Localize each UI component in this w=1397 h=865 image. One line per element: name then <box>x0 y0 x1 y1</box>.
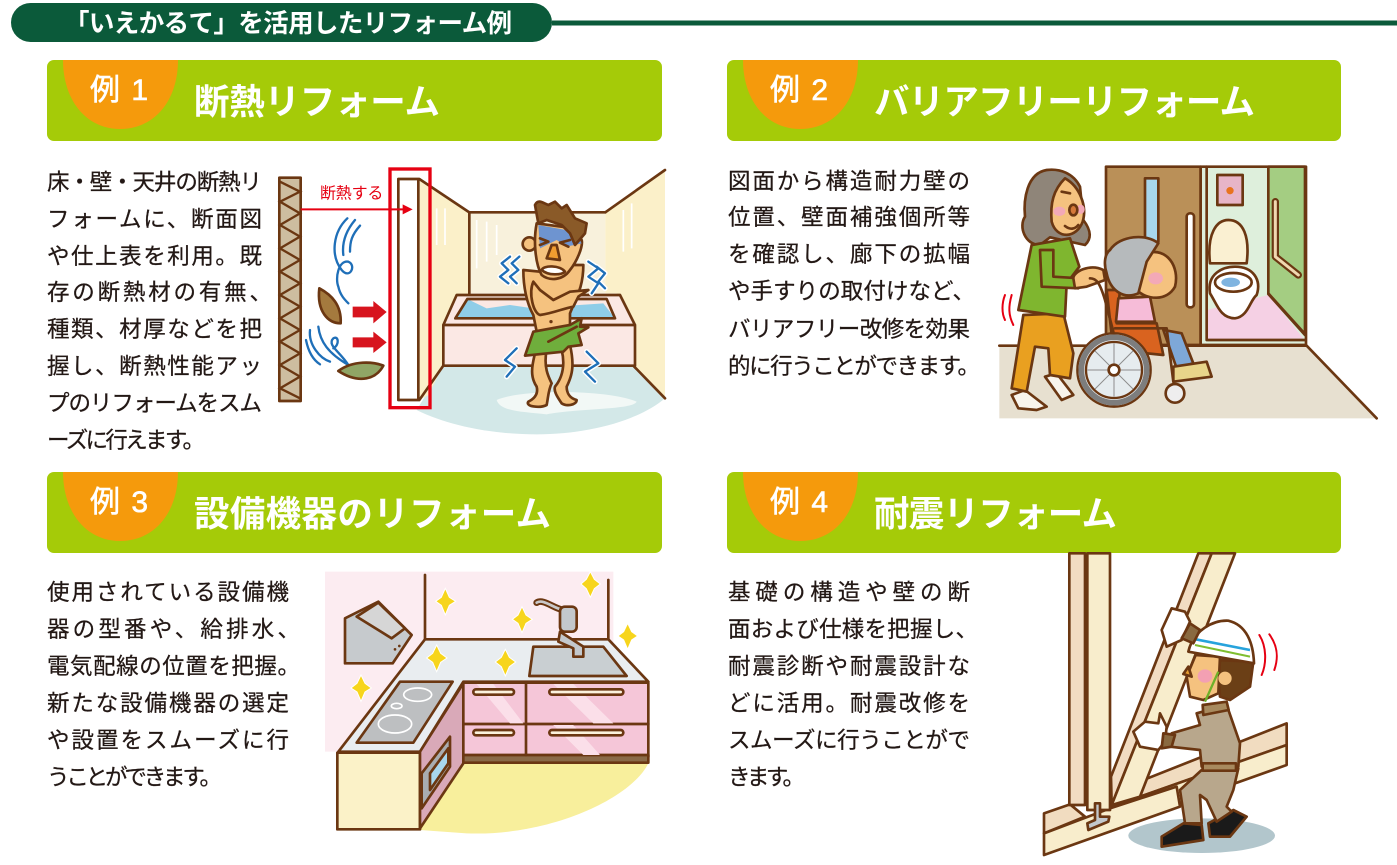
text: example 4 description: きます。 <box>728 765 805 790</box>
text: example 2 description <box>728 169 980 379</box>
header: example 3 <box>47 472 662 553</box>
page title banner: 「いえかるて」を活用したリフォーム例 <box>64 10 512 38</box>
text: example 3 description: 新たな設備機器の選定 <box>47 691 289 716</box>
text: example 1 description: 床・壁・天井の断熱リ <box>47 170 262 195</box>
illustration: wheelchair and accessible toilet <box>999 167 1377 418</box>
text: example 1 description: フォームに、断面図 <box>47 207 262 232</box>
header: example 1 <box>47 60 662 141</box>
faucet <box>537 602 583 657</box>
text: example 3 description: 使用されている設備機 <box>47 580 289 605</box>
panel: example 1 insulation <box>47 60 665 453</box>
toilet room <box>1201 167 1306 345</box>
text: example 2 description: 位置、壁面補強個所等 <box>728 205 970 230</box>
text: example 1 description: や仕上表を利用。既 <box>47 244 262 269</box>
illustration: kitchen <box>325 572 648 834</box>
character: construction worker <box>1133 608 1277 847</box>
text: example 4 description: 耐震診断や耐震設計な <box>728 654 970 679</box>
icon: shiver lines <box>500 257 605 382</box>
illustration: worker holding brace <box>1044 553 1287 855</box>
text: example 1 description: 存の断熱材の有無、 <box>47 280 272 305</box>
text: example 4 description: 基礎の構造や壁の断 <box>728 580 970 605</box>
door with handrail <box>1106 167 1201 345</box>
text: example 1 description: ーズに行えます。 <box>47 428 205 453</box>
character: shivering man <box>523 202 588 407</box>
cabinets <box>337 683 648 829</box>
text: example 1 description: 握し、断熱性能アッ <box>47 354 262 379</box>
character: caregiver woman <box>1002 170 1105 410</box>
wheelchair with seated elderly woman <box>1077 237 1212 407</box>
countertop <box>338 639 648 752</box>
bathroom room <box>417 170 665 434</box>
text: example 1 description: 種類、材厚などを把 <box>47 317 262 342</box>
header: example 2: バリアフリーリフォーム <box>874 82 1255 122</box>
text: example 4 description: スムーズに行うことがで <box>728 728 970 753</box>
text: example 2 description: 図面から構造耐力壁の <box>728 169 970 194</box>
red arrow and label: insulate <box>301 185 413 214</box>
text: example 3 description: 器の型番や、給排水、 <box>47 617 300 642</box>
text: example 2 description: バリアフリー改修を効果 <box>728 317 970 342</box>
red arrow and label: insulate: 断熱する <box>320 185 383 203</box>
text: example 3 description <box>47 580 300 790</box>
header: example 3: 例 3 <box>90 486 148 519</box>
text: example 3 description: 電気配線の位置を把握。 <box>47 654 300 679</box>
kitchen wall and floor <box>325 572 648 834</box>
header: example 4: 耐震リフォーム <box>874 494 1117 534</box>
header: example 2: 例 2 <box>770 74 828 107</box>
icon: sparkles <box>351 572 638 701</box>
page title banner <box>11 3 1397 42</box>
header: example 4 <box>727 472 1341 553</box>
icon: wind and leaves <box>306 218 383 379</box>
panel: example 4 earthquake resistance <box>727 472 1341 855</box>
panel: example 2 barrier-free <box>727 60 1377 418</box>
panel: example 3 equipment <box>47 472 662 834</box>
text: example 1 description: プのリフォームをスム <box>47 391 262 416</box>
text: example 4 description: どに活用。耐震改修を <box>728 691 970 716</box>
timber frame <box>1044 553 1287 855</box>
text: example 1 description <box>47 170 272 453</box>
text: example 3 description: や設置をスムーズに行 <box>47 728 289 753</box>
text: example 4 description: 面および仕様を把握し、 <box>728 617 978 642</box>
text: example 2 description: 的に行うことができます。 <box>728 354 980 379</box>
header: example 1: 断熱リフォーム <box>194 82 440 122</box>
illustration: cold bathroom with insulated wall <box>279 169 665 434</box>
header: example 2 <box>727 60 1341 141</box>
header: example 3: 設備機器のリフォーム <box>194 494 551 534</box>
header: example 4: 例 4 <box>770 486 828 519</box>
insulation wall section <box>279 169 430 408</box>
range hood <box>345 602 412 663</box>
text: example 2 description: を確認し、廊下の拡幅 <box>728 242 970 267</box>
header: example 1: 例 1 <box>90 74 148 107</box>
red arrows: cold air blocked <box>353 301 387 353</box>
hallway floor <box>999 346 1377 418</box>
text: example 2 description: や手すりの取付けなど、 <box>728 279 975 304</box>
text: example 3 description: うことができます。 <box>47 765 222 790</box>
text: example 4 description <box>728 580 978 790</box>
